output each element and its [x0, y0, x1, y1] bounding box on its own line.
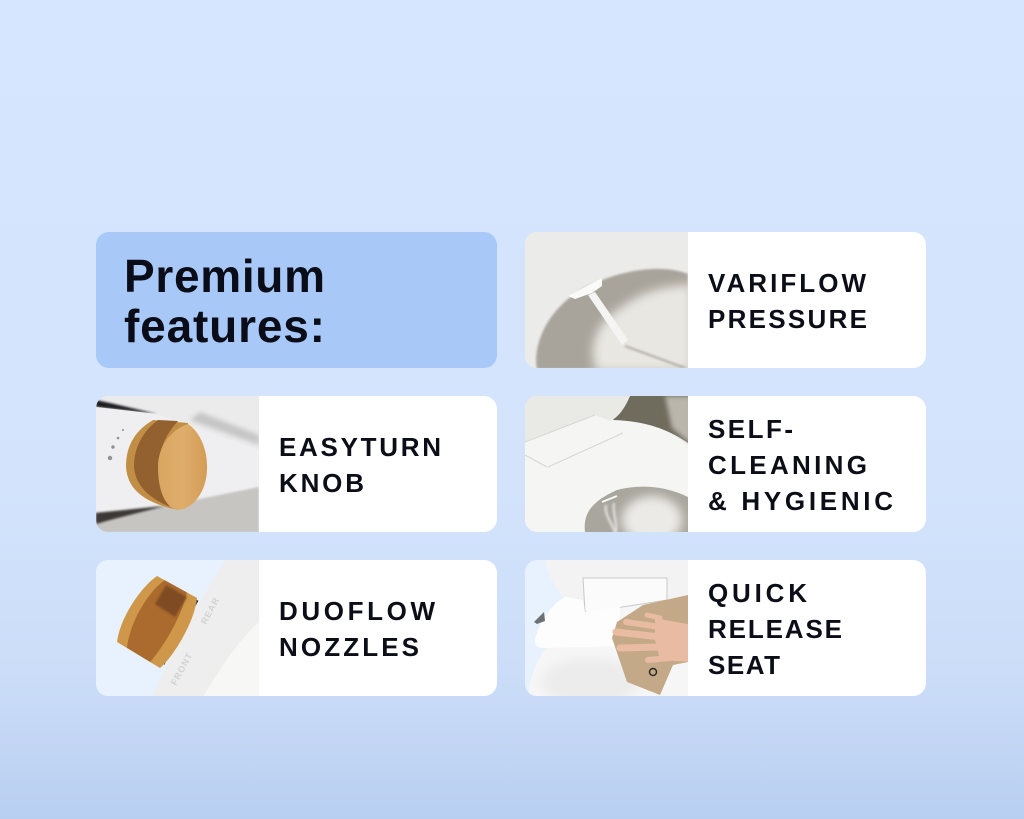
photo: bamboo dial	[96, 560, 259, 697]
label: self-cleaning and hygienic: CLEANING	[708, 450, 867, 480]
label: duoflow nozzles: DUOFLOW	[279, 596, 435, 626]
hand	[616, 615, 692, 662]
dial markings	[171, 598, 220, 686]
photo: bamboo knob	[96, 396, 259, 533]
photo: bidet nozzle in bowl	[525, 232, 692, 372]
dial markings: FRONT	[169, 650, 195, 687]
label: self-cleaning and hygienic: SELF-	[708, 414, 793, 444]
label: quick release seat: RELEASE	[708, 614, 842, 644]
towel	[612, 595, 688, 695]
photo: hand wiping seat	[525, 560, 692, 706]
panel: self-cleaning and hygienic	[525, 396, 926, 544]
indicator dots	[108, 429, 124, 460]
heading: Premium features: features:	[124, 300, 325, 352]
label: variflow pressure: VARIFLOW	[708, 268, 866, 298]
nozzle arm	[568, 278, 602, 299]
label: easyturn knob: KNOB	[279, 468, 364, 498]
panel: variflow pressure	[525, 232, 926, 372]
panel: premium features heading	[96, 232, 497, 368]
heading: Premium features: Premium	[124, 250, 325, 302]
knob face	[158, 424, 207, 510]
photo: seat with water spray	[525, 396, 688, 532]
panel: easyturn knob	[96, 396, 497, 533]
dial markings: REAR	[199, 595, 222, 626]
panel: quick release seat	[525, 560, 926, 706]
label: quick release seat: SEAT	[708, 650, 780, 680]
panel: duoflow nozzles	[96, 560, 497, 697]
knob body	[126, 420, 188, 510]
label: easyturn knob: EASYTURN	[279, 432, 441, 462]
dial body	[117, 576, 197, 668]
label: quick release seat: QUICK	[708, 578, 807, 608]
label: duoflow nozzles: NOZZLES	[279, 632, 419, 662]
label: self-cleaning and hygienic: & HYGIENIC	[708, 486, 893, 516]
label: variflow pressure: PRESSURE	[708, 304, 867, 334]
